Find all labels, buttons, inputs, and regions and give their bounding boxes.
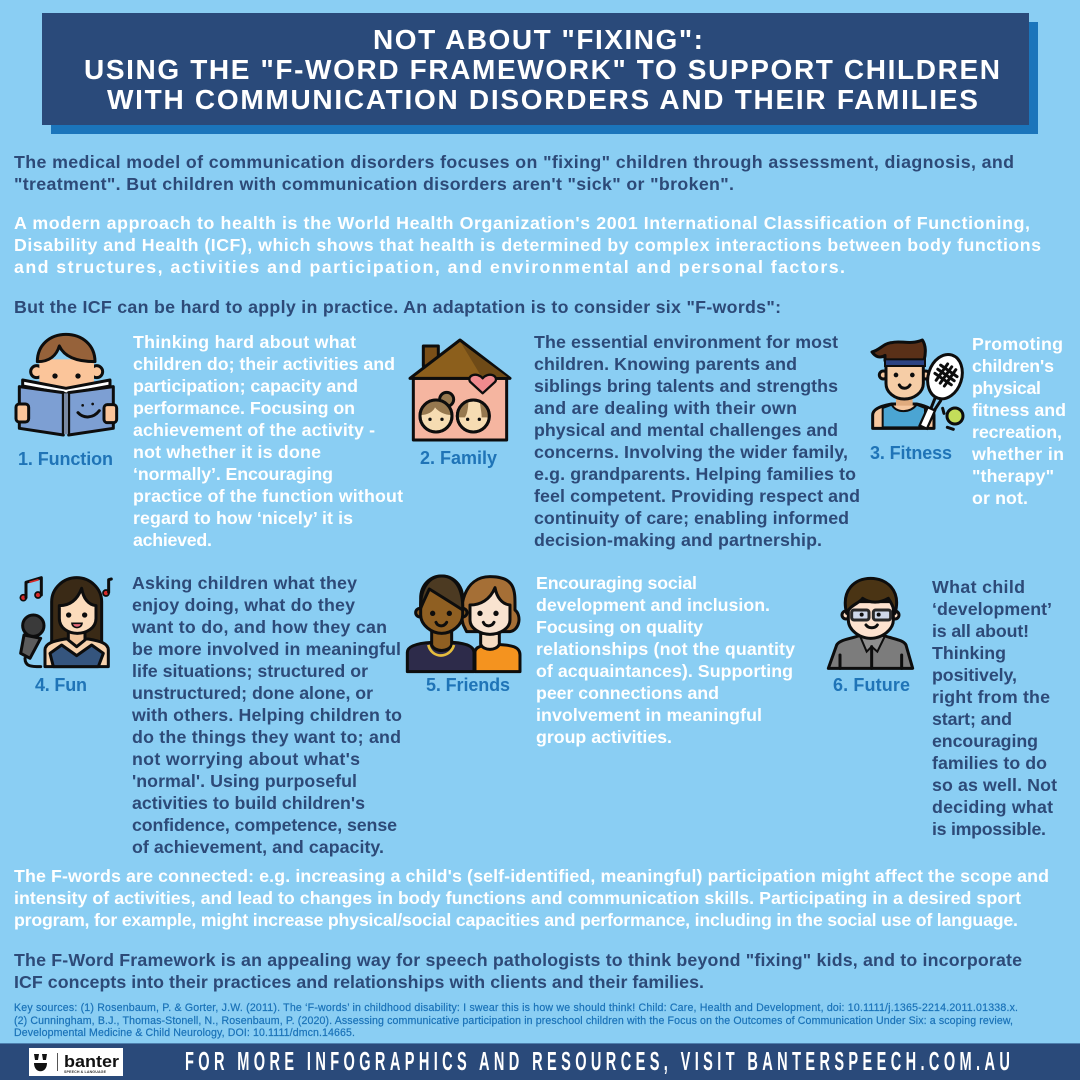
text: fitness description: fitness and bbox=[972, 400, 1066, 420]
label: function: 1. Function bbox=[18, 449, 113, 469]
text: function description: ‘normally’. Encouraging bbox=[133, 464, 333, 484]
text: future description: Thinking bbox=[932, 643, 1006, 663]
text: friends description: development and inclusion. bbox=[536, 595, 770, 615]
text: fun description: want to do, and how they can bbox=[131, 617, 387, 637]
text: family description: concerns. Involving the wider family, bbox=[534, 442, 848, 462]
text: family description: continuity of care; enabling informed bbox=[534, 508, 849, 528]
text: friends description: Encouraging social bbox=[536, 573, 697, 593]
text: family description: The essential environment for most bbox=[534, 332, 838, 352]
panel: function bbox=[16, 332, 403, 550]
title banner bbox=[42, 13, 1038, 134]
text: future description: deciding what bbox=[932, 797, 1053, 817]
text: conclusion: The F-Word Framework is an appealing way for speech pathologists to think beyond "fixing" kids, and to incorporate bbox=[14, 950, 1022, 970]
text: fitness description bbox=[971, 334, 1066, 508]
panel: family bbox=[410, 332, 860, 550]
label: family: 2. Family bbox=[420, 448, 497, 468]
panel: fitness bbox=[870, 334, 1066, 508]
text: family description: feel competent. Providing respect and bbox=[534, 486, 860, 506]
intro: ICF model bbox=[14, 213, 1041, 277]
text: connected F-words: program, for example, might increase physical/social capacities and performance, including in the social use of language. bbox=[14, 910, 1018, 930]
title banner: NOT ABOUT "FIXING": bbox=[373, 24, 703, 55]
logo: banter: SPEECH & LANGUAGE bbox=[64, 1070, 107, 1074]
text: connected F-words: The F-words are connected: e.g. increasing a child's (self-identified, meaningful) participation might affect the scope and bbox=[14, 866, 1049, 886]
label: fitness: 3. Fitness bbox=[870, 443, 952, 463]
text: fitness description: physical bbox=[972, 378, 1041, 398]
text: fun description: Asking children what they bbox=[132, 573, 357, 593]
text: friends description: Focusing on quality bbox=[536, 617, 703, 637]
text: function description: participation; capacity and bbox=[133, 376, 358, 396]
label: fun: 4. Fun bbox=[35, 675, 87, 695]
panel: future bbox=[828, 577, 1057, 839]
text: future description: positively, bbox=[932, 665, 1017, 685]
logo: banter: banter bbox=[64, 1052, 119, 1071]
text: fun description: be more involved in meaningful bbox=[132, 639, 401, 659]
footer band bbox=[0, 1043, 1080, 1080]
text: friends description bbox=[536, 573, 795, 747]
icon: house with family bbox=[410, 340, 510, 440]
text: future description: encouraging bbox=[932, 731, 1038, 751]
text: function description: regard to how ‘nicely’ it is bbox=[133, 508, 353, 528]
intro: ICF model: A modern approach to health is the World Health Organization's 2001 International Classification of Functioning, bbox=[14, 213, 1030, 233]
text: future description: is all about! bbox=[932, 621, 1029, 641]
text: family description: physical and mental challenges and bbox=[534, 420, 838, 440]
text: key sources: (2) Cunningham, B.J., Thomas-Stonell, N., Rosenbaum, P. (2020). Assessing communicative participation in preschool children with the Focus on the Outcomes of Communication Under Six: a scoping review, bbox=[14, 1015, 1013, 1027]
text: family description: e.g. grandparents. Helping families to bbox=[534, 464, 856, 484]
text: fun description: unstructured; done alone, or bbox=[132, 683, 373, 703]
icon: singer with microphone bbox=[20, 578, 111, 667]
intro: ICF model: Disability and Health (ICF), which shows that health is determined by complex interactions between body functions bbox=[14, 235, 1041, 255]
intro: medical model: The medical model of communication disorders focuses on "fixing" children through assessment, diagnosis, and bbox=[14, 152, 1014, 172]
text: fitness description: "therapy" bbox=[972, 466, 1054, 486]
text: fun description: with others. Helping children to bbox=[131, 705, 402, 725]
icon: child reading a book bbox=[16, 334, 117, 435]
text: family description: and are dealing with their own bbox=[534, 398, 797, 418]
logo: banter bbox=[29, 1048, 123, 1076]
text: fitness description: recreation, bbox=[972, 422, 1062, 442]
text: function description: achievement of the activity - bbox=[133, 420, 375, 440]
text: fun description: life situations; structured or bbox=[132, 661, 368, 681]
intro: medical model: "treatment". But children with communication disorders aren't "sick" or "broken". bbox=[14, 174, 734, 194]
text: fitness description: Promoting bbox=[972, 334, 1063, 354]
intro: medical model bbox=[14, 152, 1014, 194]
text: future description: families to do bbox=[932, 753, 1047, 773]
title banner: USING THE "F-WORD FRAMEWORK" TO SUPPORT CHILDREN bbox=[84, 54, 1000, 85]
icon: man with glasses bbox=[828, 578, 913, 668]
text: friends description: group activities. bbox=[536, 727, 672, 747]
text: family description: children. Knowing parents and bbox=[534, 354, 797, 374]
text: future description: is impossible. bbox=[932, 819, 1046, 839]
text: fun description: activities to build children's bbox=[132, 793, 365, 813]
text: function description bbox=[133, 332, 403, 550]
text: fun description: do the things they want to; and bbox=[132, 727, 401, 747]
text: fun description: of achievement, and capacity. bbox=[132, 837, 384, 857]
text: friends description: peer connections and bbox=[536, 683, 719, 703]
text: function description: children do; their activities and bbox=[133, 354, 395, 374]
intro: six F-words: But the ICF can be hard to apply in practice. An adaptation is to consider six "F-words": bbox=[14, 297, 781, 317]
text: future description: ‘development’ bbox=[932, 599, 1052, 619]
panel: friends bbox=[407, 573, 795, 747]
text: fitness description: or not. bbox=[972, 488, 1028, 508]
text: function description: not whether it is done bbox=[133, 442, 321, 462]
text: future description: so as well. Not bbox=[932, 775, 1057, 795]
text: connected F-words: intensity of activities, and lead to changes in body functions and communication skills. Participating in a desired sport bbox=[14, 888, 1021, 908]
text: friends description: relationships (not the quantity bbox=[536, 639, 795, 659]
text: future description: What child bbox=[932, 577, 1025, 597]
icon: two friends bbox=[407, 576, 520, 672]
text: family description: siblings bring talents and strengths bbox=[534, 376, 838, 396]
text: fun description bbox=[131, 573, 402, 857]
label: future: 6. Future bbox=[833, 675, 910, 695]
text: function description: Thinking hard about what bbox=[133, 332, 356, 352]
text: conclusion bbox=[14, 950, 1022, 992]
label: friends: 5. Friends bbox=[426, 675, 510, 695]
title banner: WITH COMMUNICATION DISORDERS AND THEIR FAMILIES bbox=[107, 84, 978, 115]
text: future description: start; and bbox=[932, 709, 1012, 729]
panel: fun bbox=[20, 573, 402, 857]
text: key sources bbox=[14, 1002, 1018, 1039]
text: key sources: Key sources: (1) Rosenbaum, P. & Gorter, J.W. (2011). The ‘F-words’ in childhood disability: I swear this is how we should think! Child: Care, Health and Development, doi: 10.1111/j.1365-2214.2011.01338.x. bbox=[14, 1002, 1018, 1014]
text: fitness description: children's bbox=[972, 356, 1054, 376]
text: fun description: not worrying about what's bbox=[132, 749, 360, 769]
text: future description: right from the bbox=[932, 687, 1050, 707]
text: function description: performance. Focusing on bbox=[133, 398, 355, 418]
call to action: FOR MORE INFOGRAPHICS AND RESOURCES, VISIT BANTERSPEECH.COM.AU bbox=[185, 1048, 1010, 1076]
text: key sources: Developmental Medicine & Child Neurology, DOI: 10.1111/dmcn.14665. bbox=[14, 1027, 355, 1039]
icon: tennis player bbox=[872, 340, 968, 429]
text: fun description: 'normal'. Using purposeful bbox=[132, 771, 357, 791]
text: family description: decision-making and partnership. bbox=[534, 530, 822, 550]
text: connected F-words bbox=[14, 866, 1049, 930]
text: future description bbox=[932, 577, 1057, 839]
text: fitness description: whether in bbox=[971, 444, 1064, 464]
text: friends description: of acquaintances). Supporting bbox=[536, 661, 793, 681]
text: fun description: enjoy doing, what do they bbox=[132, 595, 355, 615]
text: function description: achieved. bbox=[133, 530, 212, 550]
intro: ICF model: and structures, activities and participation, and environmental and personal factors. bbox=[14, 257, 845, 277]
text: conclusion: ICF concepts into their practices and relationships with clients and their families. bbox=[14, 972, 704, 992]
text: fun description: confidence, competence, sense bbox=[132, 815, 397, 835]
text: family description bbox=[534, 332, 860, 550]
text: friends description: involvement in meaningful bbox=[536, 705, 762, 725]
text: function description: practice of the function without bbox=[133, 486, 403, 506]
